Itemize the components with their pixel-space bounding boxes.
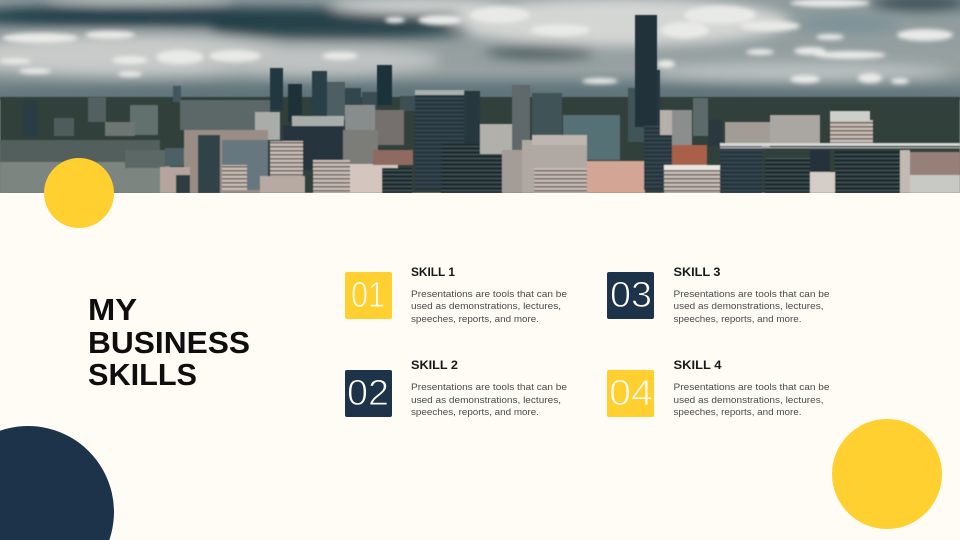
skill 4 (607, 358, 830, 418)
title (88, 292, 250, 392)
distant green city band (0, 97, 960, 193)
number badge 03: 03 (610, 274, 652, 315)
circle: yellow bottom-right (832, 419, 942, 529)
skill 3 text: speeches, reports, and more. (674, 314, 802, 325)
skill 3 text (674, 265, 830, 325)
skill 4 text: speeches, reports, and more. (674, 407, 802, 418)
number badge 02: 02 (347, 372, 389, 413)
skill 1 text: Presentations are tools that can be (411, 289, 567, 300)
number badge 01: 01 (351, 274, 385, 315)
skill 2 text: used as demonstrations, lectures, (411, 395, 561, 406)
skill 1 text: speeches, reports, and more. (411, 314, 539, 325)
photo: city skyline under cloudy sky (0, 0, 960, 193)
circle: navy bottom-left (0, 426, 114, 540)
skill 2 text (411, 358, 567, 418)
skill 4 text: used as demonstrations, lectures, (674, 395, 824, 406)
skill 2 (345, 358, 567, 418)
number badge 04: 04 (609, 372, 653, 413)
skill 3 text: used as demonstrations, lectures, (674, 301, 824, 312)
skill 3 (607, 265, 830, 325)
skill 1 text: SKILL 1 (411, 265, 455, 279)
skill 1 text (411, 265, 567, 325)
circle: yellow top-left (44, 158, 114, 228)
skill 2 text: SKILL 2 (411, 358, 458, 372)
skill 3 text: Presentations are tools that can be (674, 289, 830, 300)
skill 1 (345, 265, 567, 325)
title: SKILLS (88, 357, 197, 392)
title: MY (88, 292, 137, 327)
skill 2 text: Presentations are tools that can be (411, 382, 567, 393)
skill 1 text: used as demonstrations, lectures, (411, 301, 561, 312)
title: BUSINESS (88, 325, 250, 360)
skill 4 text: Presentations are tools that can be (674, 382, 830, 393)
skill 2 text: speeches, reports, and more. (411, 407, 539, 418)
skill 3 text: SKILL 3 (674, 265, 721, 279)
skill 4 text: SKILL 4 (674, 358, 722, 372)
skill 4 text (674, 358, 830, 418)
